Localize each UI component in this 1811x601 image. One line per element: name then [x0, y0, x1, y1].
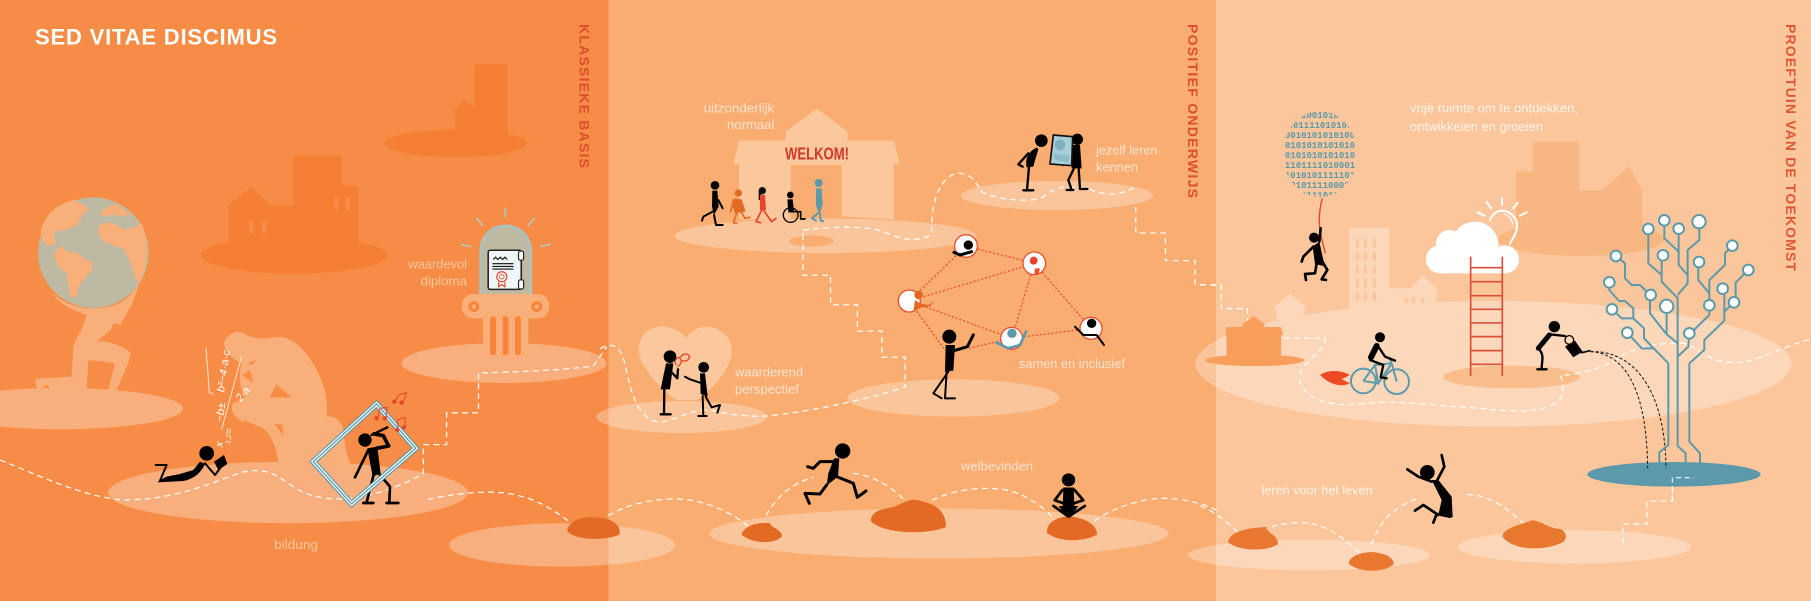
panel 1 background shapes	[201, 64, 527, 274]
binary balloon: 1101111010001	[1285, 161, 1356, 171]
section heading: proeftuin van de toekomst: PROEFTUIN VAN DE TOEKOMST	[1783, 24, 1799, 271]
column with diploma	[462, 208, 550, 356]
pond	[1587, 462, 1761, 487]
bicycle	[1351, 359, 1409, 394]
red hearts	[675, 354, 689, 367]
label: vrije ruimte: ontwikkelen en groeien	[1410, 120, 1543, 134]
label: uitzonderlijk normaal: uitzonderlijk	[704, 101, 775, 115]
figure: hanging from balloon	[1302, 228, 1327, 280]
figure: red girl	[756, 187, 776, 223]
label: waardevol diploma	[407, 257, 468, 289]
binary balloon: 0101010101010	[1285, 151, 1355, 161]
panel 2 shapes	[639, 108, 899, 400]
orange house	[1205, 316, 1304, 366]
rocks	[742, 500, 1097, 542]
figure: meditating	[1054, 473, 1085, 517]
label: jezelf leren kennen	[1095, 144, 1158, 174]
network lines	[909, 246, 1091, 350]
globe	[38, 197, 149, 308]
figure: right in couple	[685, 362, 720, 416]
figure: blue person	[812, 179, 823, 221]
figure: person with raised arm	[933, 330, 973, 398]
panel 3 castle	[1498, 142, 1664, 256]
couple and runner	[661, 350, 866, 503]
tree branches	[1609, 220, 1748, 463]
formula	[206, 347, 253, 449]
figure: orange person	[731, 189, 750, 223]
figure: left in couple	[661, 350, 678, 414]
atlas with globe	[35, 197, 149, 390]
formula: =	[223, 428, 235, 435]
panel: positief onderwijs background	[608, 0, 1216, 601]
formula: 1,2	[225, 434, 233, 444]
rock	[567, 517, 620, 539]
figure: jumper	[1407, 455, 1453, 523]
figure: cyclist	[1370, 332, 1395, 378]
ground ellipses	[0, 181, 1792, 570]
binary balloon: 0111010	[1301, 191, 1339, 201]
section heading: klassieke basis: KLASSIEKE BASIS	[576, 24, 592, 168]
figure: runner	[805, 443, 866, 503]
binary balloon	[1285, 111, 1356, 201]
left person	[1018, 134, 1048, 190]
panel: klassieke basis background	[0, 0, 608, 601]
label: bildung: bildung	[274, 538, 318, 552]
panel 3 figures	[1302, 198, 1590, 394]
tree nodes	[1604, 215, 1754, 339]
panel: proeftuin van de toekomst background	[1216, 0, 1811, 601]
label: samen en inclusief: samen en inclusief	[1019, 357, 1125, 371]
dashed routes panel 2	[600, 173, 1220, 542]
title: SED VITAE DISCIMUS	[35, 24, 277, 50]
figure: wheelchair user	[783, 192, 805, 222]
figure: gardener with can	[1537, 321, 1590, 369]
binary balloon: 01011110001	[1290, 181, 1350, 191]
section heading: positief onderwijs: POSITIEF ONDERWIJS	[1185, 24, 1201, 198]
binary balloon: 0010101010100	[1285, 131, 1355, 141]
label: uitzonderlijk normaal: normaal	[727, 118, 774, 132]
welkom sign: WELKOM!	[785, 143, 849, 163]
dashed routes panel 1	[0, 208, 620, 539]
tree with pond	[1587, 215, 1761, 500]
label: uitzonderlijk normaal	[704, 101, 775, 132]
balloon string	[1319, 198, 1325, 253]
cloud	[1426, 222, 1519, 273]
node black person	[954, 235, 977, 257]
label: waarderend perspectief: perspectief	[735, 382, 799, 396]
background castle small	[384, 64, 527, 157]
label: vrije ruimte	[1410, 101, 1578, 134]
node blue person	[997, 327, 1026, 349]
formula: 2·a	[233, 385, 253, 405]
school visitors	[702, 179, 823, 225]
figure: reading person	[156, 446, 227, 482]
figure: walker	[702, 181, 723, 225]
label: leren voor het leven: leren voor het leven	[1262, 484, 1373, 498]
label: waarderend perspectief: waarderend	[734, 365, 803, 379]
welcome building	[733, 108, 899, 219]
formula: b²−4·a·c	[215, 348, 233, 393]
idea bulb	[1478, 198, 1527, 244]
dashed routes panel 3	[1200, 285, 1811, 571]
figure: singer	[355, 427, 398, 503]
heart	[639, 326, 732, 400]
flame	[1320, 371, 1350, 385]
formula: −b±	[214, 401, 228, 423]
pond dashed route	[1672, 478, 1694, 500]
label: waardevol diploma: diploma	[420, 275, 468, 289]
background castle large	[201, 155, 387, 274]
network diagram	[898, 235, 1104, 398]
frame around singer	[313, 404, 416, 504]
rocks	[1228, 520, 1566, 571]
music notes	[375, 393, 407, 432]
right person	[1063, 134, 1087, 190]
ladder	[1471, 257, 1502, 376]
mirror	[1050, 135, 1073, 166]
label: waardevol diploma: waardevol	[407, 257, 467, 271]
binary balloon: 01100101001	[1290, 111, 1350, 121]
node orange person	[898, 290, 934, 312]
node red person	[1023, 252, 1046, 275]
binary balloon: 0101010101010	[1285, 141, 1355, 151]
atlas silhouette	[35, 285, 138, 390]
city skyline and ladder base	[1275, 228, 1580, 388]
label: welbevinden: welbevinden	[960, 460, 1033, 474]
water stream	[1591, 352, 1666, 468]
binary balloon: 001111010100	[1288, 121, 1352, 131]
label: jezelf leren kennen: kennen	[1096, 160, 1138, 174]
mirror pair	[1018, 134, 1087, 190]
formula: x	[213, 440, 226, 449]
label: vrije ruimte: vrije ruimte om te ontdekken,	[1410, 101, 1578, 115]
panel 1 figures	[156, 347, 416, 504]
node black person with arms	[1075, 317, 1104, 345]
thinker silhouette	[224, 332, 352, 467]
label: waarderend perspectief	[734, 365, 803, 396]
binary balloon: 1010101111101	[1285, 171, 1356, 181]
label: jezelf leren kennen: jezelf leren	[1095, 144, 1158, 158]
